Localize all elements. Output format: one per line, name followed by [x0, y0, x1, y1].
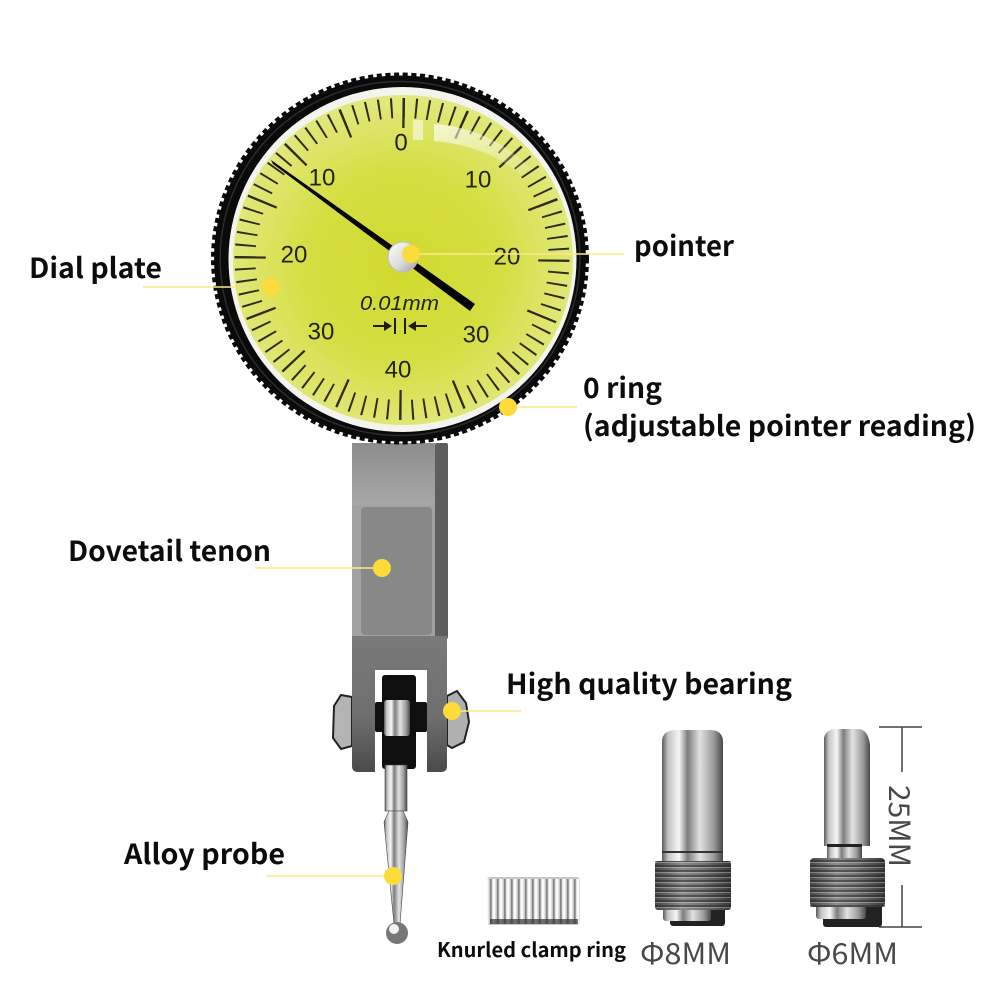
- glass highlight small: [413, 120, 423, 140]
- 6mm base collar: [816, 904, 866, 919]
- probe ball: [386, 922, 408, 944]
- callout: Dial plate: Dial plate: [29, 247, 162, 287]
- callout: Dial plate: [29, 247, 280, 296]
- accessory: 6mm stem: [810, 729, 885, 927]
- callout: 0 ring: 0 ring: [583, 367, 662, 407]
- 8mm base: [670, 906, 725, 926]
- nut: right bearing nut: [447, 691, 469, 748]
- callout: Dovetail tenon: [68, 530, 391, 577]
- 8mm base collar: [663, 906, 711, 921]
- scale ticks: [233, 96, 571, 422]
- white bezel: [228, 87, 576, 432]
- stem side rail: [435, 443, 448, 639]
- scale numbers: 20: [281, 242, 307, 268]
- 6mm base: [823, 904, 882, 927]
- dial: [214, 75, 586, 442]
- probe shaft: [385, 765, 407, 811]
- callout: Dovetail tenon: Dovetail tenon: [68, 530, 271, 570]
- bearing axle left: [375, 702, 383, 732]
- knurled zero ring: [214, 75, 586, 442]
- yellow dial face: [233, 95, 573, 425]
- scale numbers: 20: [494, 244, 520, 270]
- bearing drum: [384, 700, 410, 736]
- callout: Alloy probe: Alloy probe: [123, 833, 285, 873]
- dovetail plate: [352, 505, 435, 638]
- probe ball highlight: [389, 924, 399, 934]
- scale numbers: 40: [385, 356, 411, 384]
- nut: left bearing nut: [333, 695, 352, 749]
- dovetail plate inner face: [361, 507, 432, 635]
- 6mm groove: [827, 844, 862, 847]
- pointer needle: [271, 160, 475, 311]
- unit label: 0.01mm: [360, 293, 439, 315]
- callout: Alloy probe: [123, 833, 402, 885]
- probe: [384, 765, 408, 944]
- callout: pointer: [402, 225, 735, 265]
- accessory: knurled clamp ring: [487, 877, 580, 925]
- scale numbers: 10: [309, 164, 335, 192]
- bearing axle right: [414, 702, 427, 732]
- scale numbers: 10: [465, 166, 491, 194]
- callout: pointer: pointer: [634, 225, 735, 265]
- label: Knurled clamp ring: Knurled clamp ring: [437, 934, 626, 963]
- accessory: 8mm stem: [655, 730, 731, 926]
- label: 8mm diameter: Φ8MM: [640, 931, 731, 973]
- scale numbers: [281, 130, 520, 384]
- callout: 0 ring: (adjustable pointer reading): [583, 405, 976, 445]
- label: 6mm diameter: Φ6MM: [807, 931, 898, 973]
- resolution arrows: [373, 318, 427, 334]
- body: dovetail stem and fork: [333, 443, 469, 772]
- glass highlight: [434, 124, 530, 176]
- probe taper: [384, 811, 408, 924]
- pointer hub: [388, 242, 418, 272]
- 8mm shaft: [662, 730, 723, 862]
- scale numbers: 0: [394, 130, 408, 156]
- 6mm shaft: [824, 729, 870, 846]
- dimension label: 25MM: 25MM: [880, 785, 922, 867]
- 8mm groove: [662, 851, 723, 853]
- bearing carrier: [382, 675, 416, 769]
- stem top block: [352, 443, 435, 505]
- scale numbers: 30: [463, 322, 489, 348]
- dimension bracket: [879, 727, 922, 927]
- fork: [352, 636, 447, 772]
- callout: 0 ring: [499, 367, 976, 445]
- callout: High quality bearing: High quality bearing: [506, 663, 792, 703]
- 6mm thread: [810, 858, 885, 907]
- 6mm neck: [827, 847, 862, 861]
- callout: High quality bearing: [443, 663, 792, 720]
- 8mm thread: [655, 861, 731, 910]
- scale numbers: 30: [308, 318, 334, 346]
